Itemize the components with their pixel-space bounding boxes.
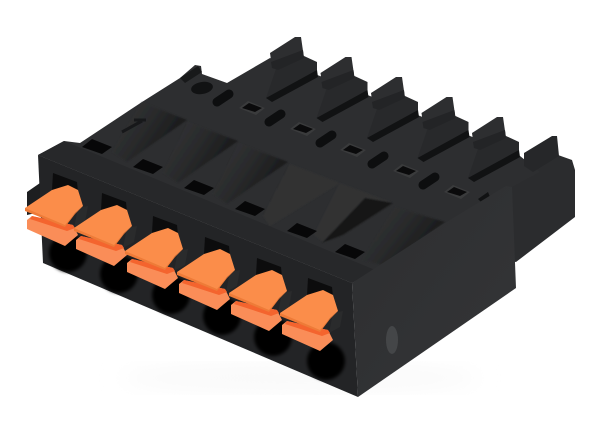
front windows [82, 139, 365, 259]
wire entry holes [49, 234, 345, 380]
front face [38, 155, 358, 397]
left lever backing [27, 183, 40, 215]
rear slots [217, 94, 490, 202]
embossed T mark [122, 120, 146, 132]
last rear tab [524, 136, 559, 172]
side panel dimple [386, 326, 398, 354]
rear windows [190, 80, 470, 199]
back tab [180, 66, 202, 83]
orange levers [25, 173, 343, 351]
top surface [38, 58, 540, 283]
recessed channels [112, 102, 445, 265]
side panel [352, 186, 516, 397]
front chamfer band [38, 141, 375, 283]
rear ribs [266, 37, 520, 182]
rear block [505, 155, 575, 262]
ground shadow [120, 364, 480, 392]
connector body [38, 37, 559, 283]
